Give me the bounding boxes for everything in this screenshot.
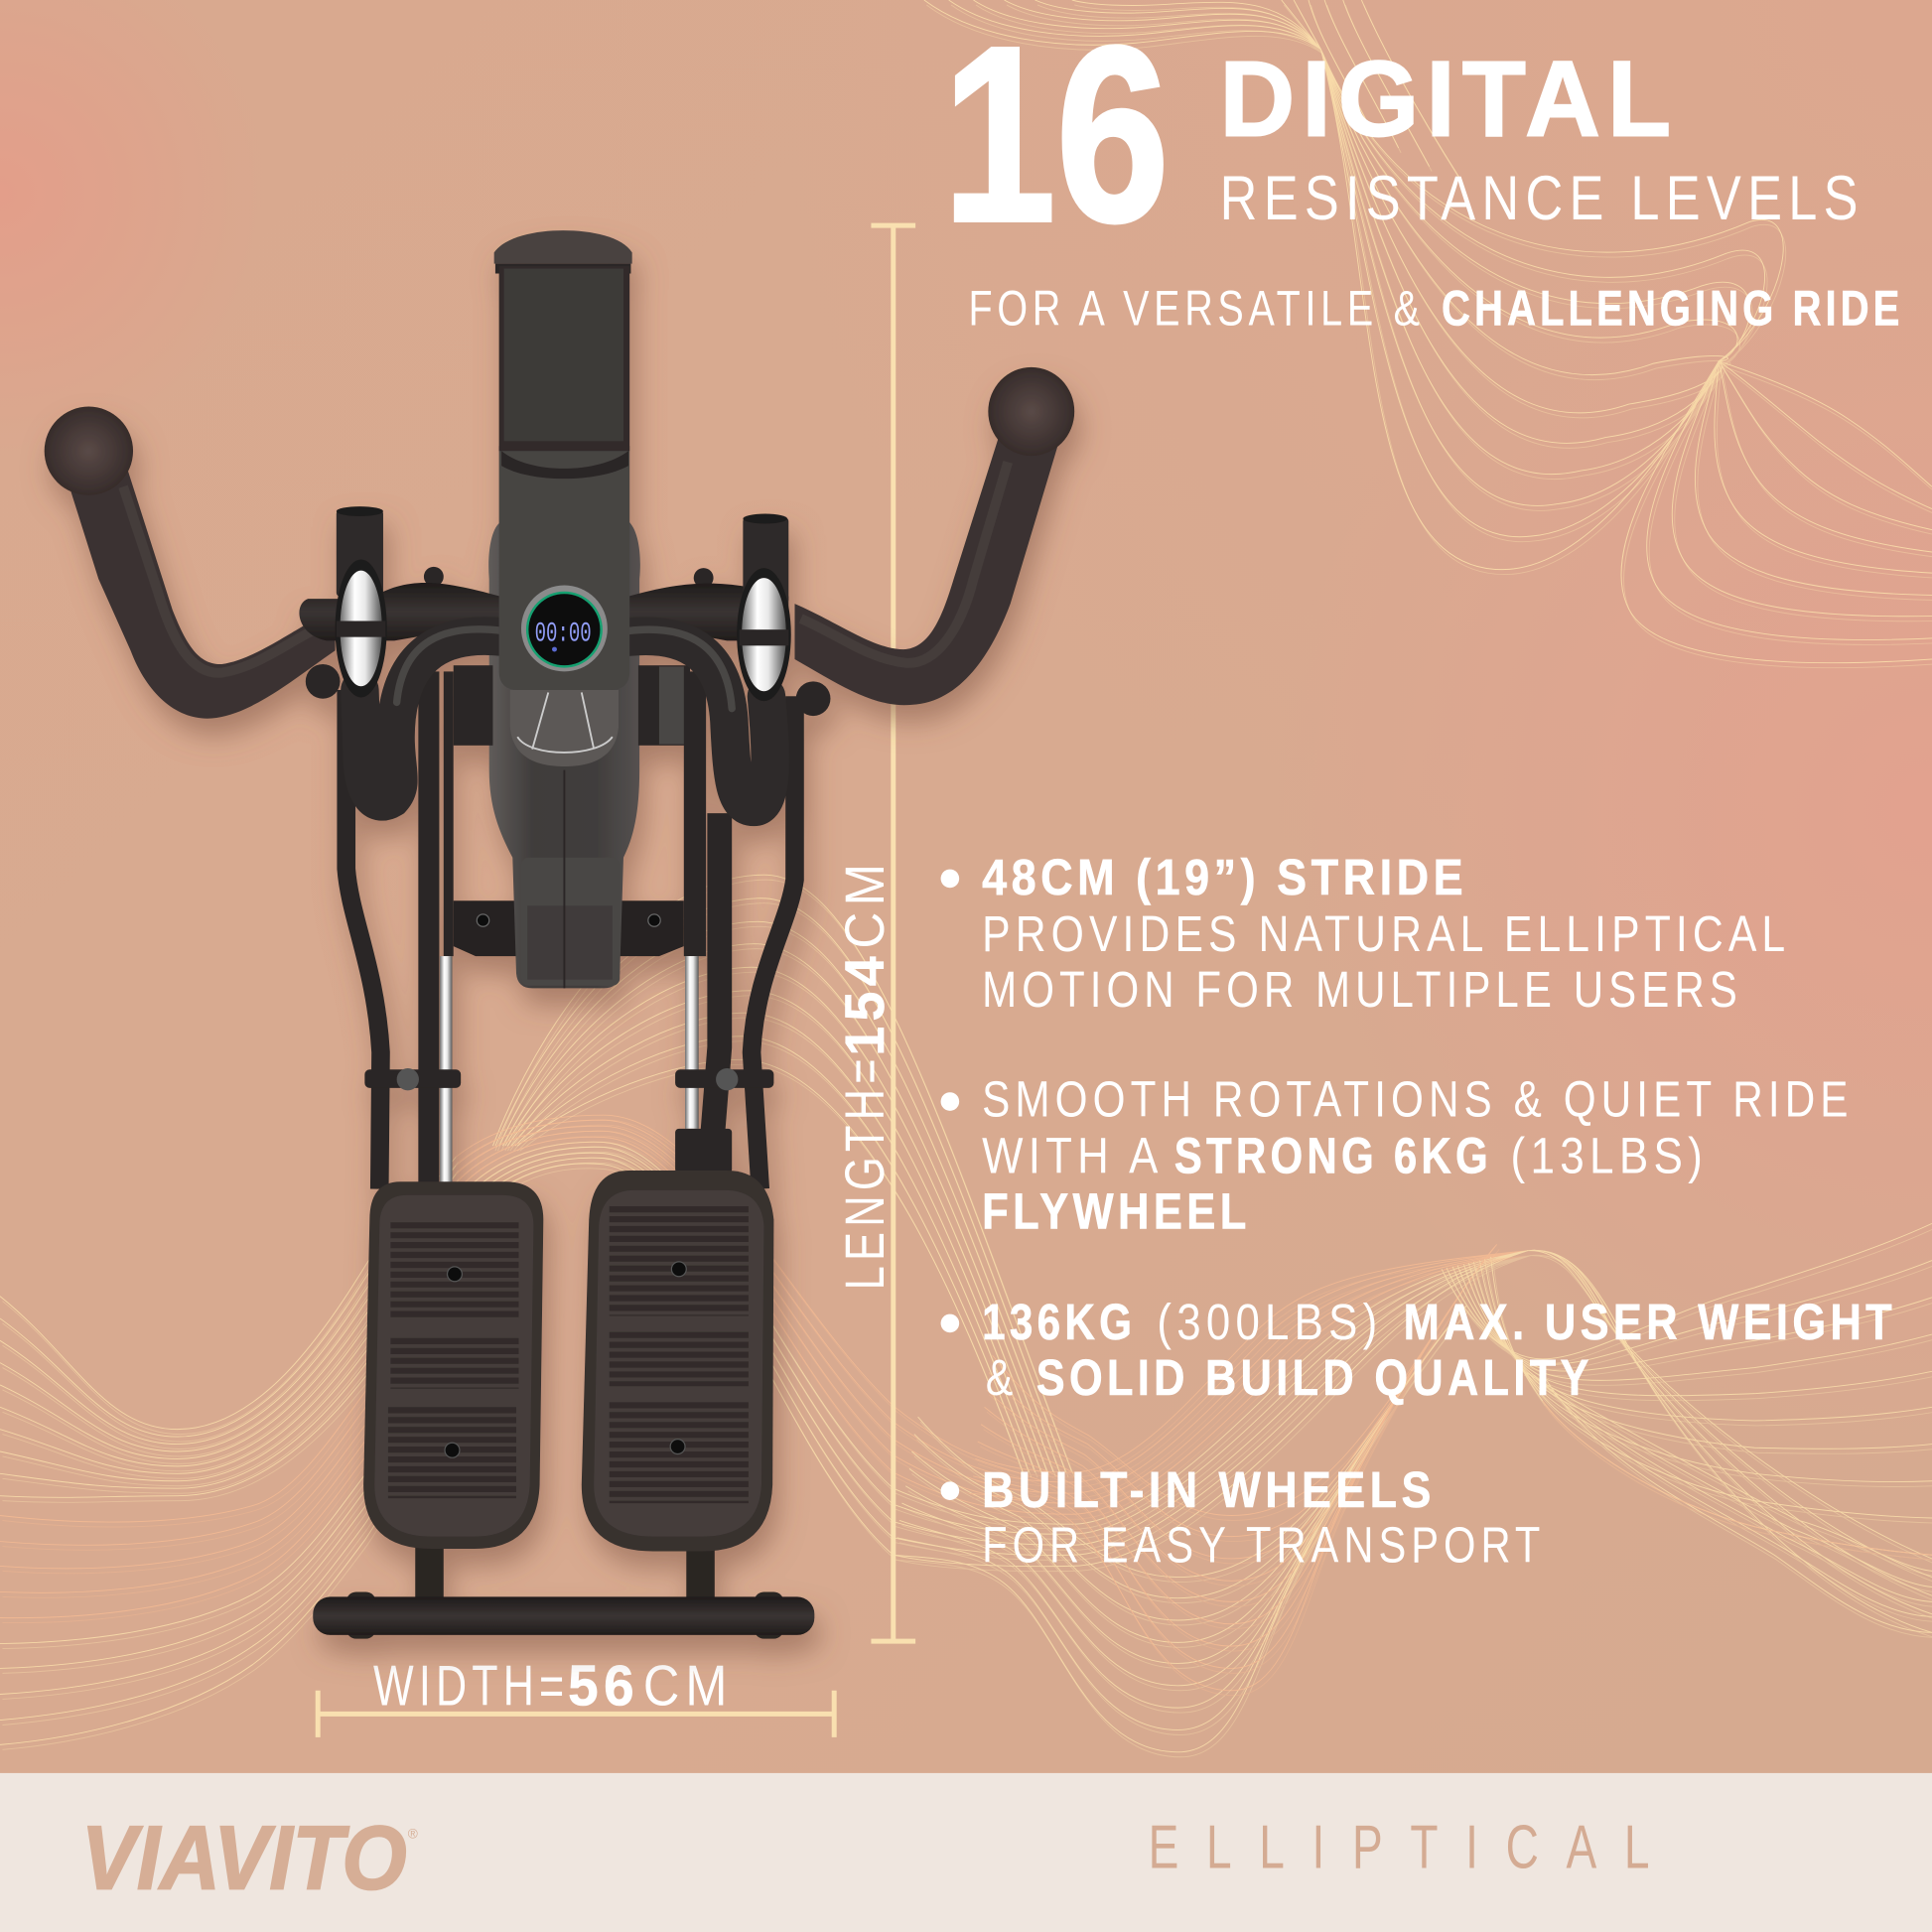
subheading bbox=[968, 281, 1903, 337]
bullet: wheels: BUILT-IN WHEELS bbox=[982, 1461, 1436, 1518]
logo: Viavito: VIAVITO bbox=[81, 1809, 407, 1909]
length label: CM bbox=[833, 858, 896, 949]
bullet: wheels: FOR EASY TRANSPORT bbox=[982, 1517, 1545, 1574]
chrome rods bbox=[440, 956, 699, 1184]
logo: Viavito: ® bbox=[408, 1827, 418, 1842]
width label: 56 bbox=[568, 1655, 639, 1719]
bullet: max user weight: (300LBS) bbox=[1157, 1294, 1382, 1350]
bullet: flywheel bbox=[941, 1070, 1854, 1239]
right pedal bbox=[582, 1171, 773, 1552]
bullet: stride: PROVIDES NATURAL ELLIPTICAL bbox=[982, 905, 1790, 962]
width label: CM bbox=[643, 1655, 733, 1719]
word DIGITAL: DIGITAL bbox=[1220, 39, 1678, 159]
upper crossbar bbox=[299, 567, 788, 640]
bullet: flywheel: (13LBS) bbox=[1511, 1127, 1708, 1183]
length dimension line bbox=[871, 225, 915, 1641]
length label: LENGTH= bbox=[833, 1053, 896, 1290]
bullet: wheels bbox=[941, 1461, 1545, 1574]
base stabiliser bbox=[313, 1540, 814, 1639]
big number 16: 16 bbox=[942, 0, 1170, 274]
digital display: 00:00 bbox=[535, 619, 592, 649]
footer band bbox=[0, 1773, 1932, 1932]
mechanism blocks bbox=[306, 664, 830, 746]
cross bracket bbox=[454, 900, 684, 956]
digital display bbox=[521, 586, 608, 671]
bullet: max user weight bbox=[941, 1294, 1896, 1406]
bullet: flywheel: WITH A bbox=[982, 1127, 1164, 1183]
flywheel housing bbox=[488, 521, 640, 988]
left pedal bbox=[363, 1181, 543, 1549]
width dimension line bbox=[318, 1691, 834, 1737]
bullet: max user weight: & bbox=[986, 1349, 1018, 1406]
right chrome grip sensor bbox=[737, 568, 791, 701]
subheading: FOR A VERSATILE & bbox=[968, 281, 1425, 337]
U handles bbox=[359, 629, 770, 807]
pivot bars bbox=[364, 1068, 773, 1173]
bullet: stride bbox=[941, 849, 1790, 1018]
posts bbox=[337, 506, 788, 604]
console panel bbox=[499, 446, 629, 690]
product name: ELLIPTICAL bbox=[1149, 1813, 1677, 1881]
bullet: max user weight: 136KG bbox=[982, 1294, 1136, 1350]
product: elliptical trainer bbox=[45, 230, 1074, 1639]
bullet: max user weight: SOLID BUILD QUALITY bbox=[1036, 1349, 1593, 1406]
bullet: stride: 48CM (19”) STRIDE bbox=[982, 849, 1467, 905]
width label: WIDTH= bbox=[373, 1655, 569, 1719]
bullet: flywheel: FLYWHEEL bbox=[982, 1182, 1251, 1239]
heading: 16 digital resistance levels bbox=[942, 0, 1864, 274]
bullet: stride: MOTION FOR MULTIPLE USERS bbox=[982, 961, 1742, 1018]
right grip bbox=[794, 367, 1074, 705]
left grip bbox=[45, 407, 336, 719]
tablet holder bbox=[494, 230, 632, 479]
length label: 154 bbox=[833, 951, 896, 1056]
side rails bbox=[346, 671, 794, 1189]
bullet: flywheel: STRONG 6KG bbox=[1174, 1127, 1492, 1183]
left chrome grip sensor bbox=[336, 559, 387, 697]
